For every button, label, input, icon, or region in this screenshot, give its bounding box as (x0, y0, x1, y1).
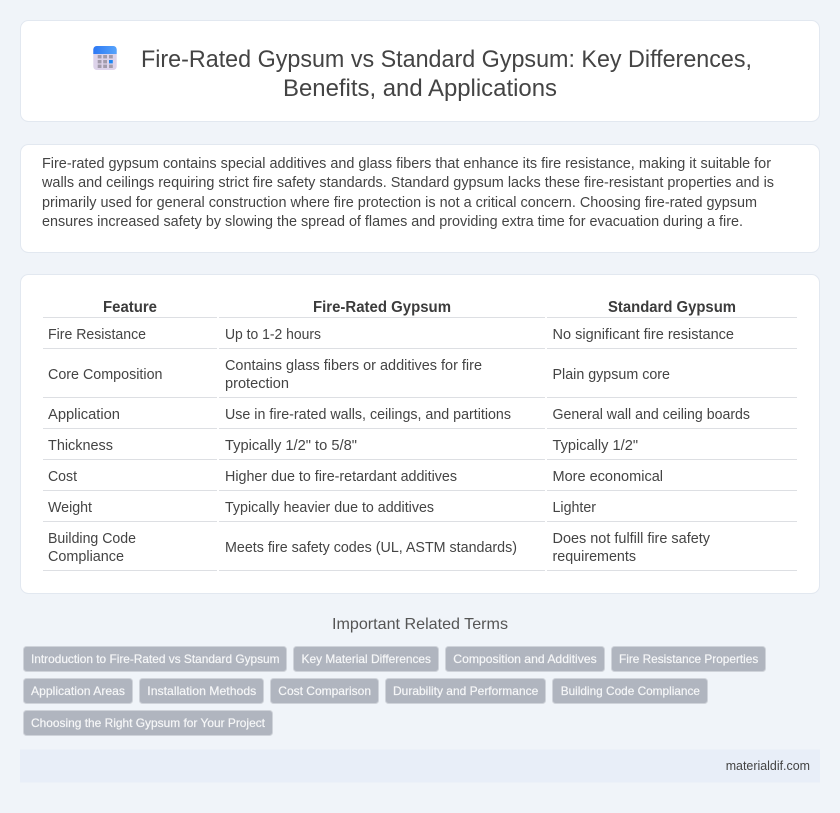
footer (20, 750, 820, 782)
table row: cost: Higher due to fire-retardant additives (225, 469, 457, 485)
table row: fire resistance: Fire Resistance (48, 327, 146, 343)
tag: installation methods (140, 678, 264, 704)
title: Benefits, and Applications (283, 75, 557, 102)
table row: core composition: Core Composition (48, 367, 162, 383)
text block: introduction paragraph (41, 156, 774, 230)
tag: building code compliance (552, 678, 708, 704)
tag: key material differences (294, 646, 438, 672)
table row: fire resistance: Up to 1-2 hours (225, 327, 321, 343)
tag: building code compliance: Building Code Compliance (561, 684, 700, 698)
title: Fire-Rated Gypsum vs Standard Gypsum: Key Differences, (141, 46, 752, 73)
tag: application areas: Application Areas (31, 684, 125, 698)
table row: weight (43, 500, 797, 522)
table row: building code compliance: Does not fulfill fire safety (552, 531, 711, 547)
table row: core composition: Plain gypsum core (552, 367, 670, 383)
table header row: Fire-Rated Gypsum (313, 299, 451, 316)
text block: introduction paragraph: ensures increased safety by slowing the spread of flames and providing extra time for evacuation during a fire. (42, 214, 743, 230)
table row: building code compliance (43, 531, 797, 571)
text block: introduction paragraph: primarily used for general construction where fire protection is not a critical concern. Choosing fire-rated gypsum (42, 195, 757, 211)
table row: cost: More economical (552, 469, 663, 485)
table row: thickness: Typically 1/2" to 5/8" (225, 438, 357, 454)
panel: comparison table (20, 274, 820, 594)
related terms tags (24, 646, 766, 736)
table row: application (43, 407, 797, 429)
tag: cost comparison: Cost Comparison (278, 684, 371, 698)
table row: weight: Weight (48, 500, 92, 516)
tag: fire resistance properties (612, 646, 766, 672)
table row: thickness: Typically 1/2" (552, 438, 638, 454)
table row: application: Application (48, 407, 120, 423)
tag: cost comparison (270, 678, 378, 704)
table row: fire resistance: No significant fire resistance (552, 327, 734, 343)
table row: core composition: Contains glass fibers or additives for fire (225, 358, 482, 374)
tag: choosing the right gypsum (24, 710, 272, 736)
table row: application: General wall and ceiling boards (552, 407, 750, 423)
tag: composition and additives (446, 646, 604, 672)
panel: header (20, 20, 820, 122)
table header row: Standard Gypsum (608, 299, 736, 316)
table row: weight: Lighter (552, 500, 596, 516)
text block: introduction paragraph: Fire-rated gypsum contains special additives and glass fibers that enhance its fire resistance, making it suitable for (42, 156, 771, 172)
table row: cost (43, 469, 797, 491)
title (141, 46, 752, 102)
tag: installation methods: Installation Methods (147, 684, 256, 698)
table row: building code compliance: Meets fire safety codes (UL, ASTM standards) (225, 540, 517, 556)
tag: application areas (24, 678, 132, 704)
tag: introduction (24, 646, 286, 672)
table row: cost: Cost (48, 469, 77, 485)
text block: introduction paragraph: walls and ceilings requiring strict fire safety standards. Standard gypsum lacks these fire-resistant properties and is (41, 175, 774, 191)
tag: fire resistance properties: Fire Resistance Properties (619, 652, 758, 666)
heading: important related terms: Important Related Terms (332, 616, 508, 633)
table row: core composition: protection (225, 376, 289, 392)
tag: durability and performance: Durability and Performance (393, 684, 539, 698)
tag: composition and additives: Composition and Additives (453, 652, 597, 666)
table row: thickness (43, 438, 797, 460)
icon: calendar (93, 46, 117, 70)
table header row (43, 299, 797, 318)
table row: building code compliance: requirements (552, 549, 636, 565)
table row: weight: Typically heavier due to additives (225, 500, 434, 516)
table row: application: Use in fire-rated walls, ceilings, and partitions (225, 407, 511, 423)
table row: core composition (43, 358, 797, 398)
tag: introduction: Introduction to Fire-Rated vs Standard Gypsum (31, 652, 280, 666)
tag: key material differences: Key Material Differences (302, 652, 431, 666)
table row: fire resistance (43, 327, 797, 349)
table row: thickness: Thickness (48, 438, 113, 454)
table header row: Feature (103, 299, 157, 316)
tag: durability and performance (386, 678, 546, 704)
table row: building code compliance: Compliance (48, 549, 124, 565)
panel: introduction (20, 144, 820, 252)
footer: materialdif.com (726, 759, 810, 773)
tag: choosing the right gypsum: Choosing the Right Gypsum for Your Project (31, 716, 266, 730)
table row: building code compliance: Building Code (48, 531, 136, 547)
